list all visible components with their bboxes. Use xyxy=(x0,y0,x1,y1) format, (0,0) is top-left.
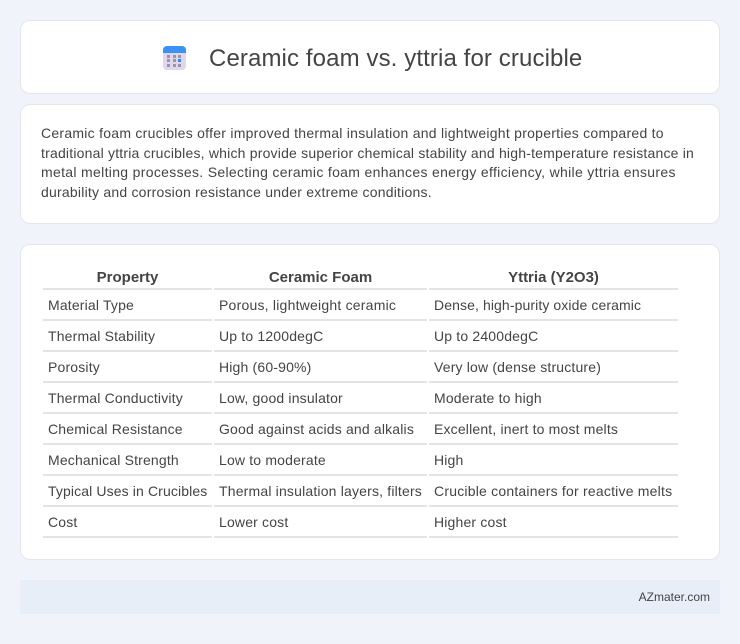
footer credit: AZmater.com xyxy=(639,590,710,604)
intro paragraph xyxy=(41,125,694,200)
comparison table: High (60-90%) xyxy=(219,359,311,375)
comparison table: Chemical Resistance xyxy=(48,421,183,437)
panel: intro text card xyxy=(20,104,720,224)
intro paragraph: traditional yttria crucibles, which provide superior chemical stability and high-temperature resistance in xyxy=(41,145,694,161)
comparison table xyxy=(43,269,678,538)
comparison table: Material Type xyxy=(48,297,134,313)
comparison table: Good against acids and alkalis xyxy=(219,421,414,437)
comparison table: Excellent, inert to most melts xyxy=(434,421,618,437)
comparison table: Thermal insulation layers, filters xyxy=(219,483,422,499)
comparison table: Porous, lightweight ceramic xyxy=(219,297,396,313)
comparison table: Cost xyxy=(48,514,77,530)
footer bar xyxy=(20,580,720,614)
table header: Property: Property xyxy=(97,269,158,286)
table header: Yttria: Yttria (Y2O3) xyxy=(508,269,599,286)
comparison table: Thermal Stability xyxy=(48,328,155,344)
icon: calendar xyxy=(163,46,186,70)
comparison table: Porosity xyxy=(48,359,100,375)
panel: comparison table card xyxy=(20,244,720,560)
comparison table: Mechanical Strength xyxy=(48,452,179,468)
comparison table: Lower cost xyxy=(219,514,288,530)
intro paragraph: metal melting processes. Selecting ceramic foam enhances energy efficiency, while yttria ensures xyxy=(41,164,676,180)
panel: title card xyxy=(20,20,720,94)
comparison table: Up to 1200degC xyxy=(219,328,323,344)
comparison table: Dense, high-purity oxide ceramic xyxy=(434,297,641,313)
comparison table: High xyxy=(434,452,463,468)
intro paragraph: Ceramic foam crucibles offer improved thermal insulation and lightweight properties compared to xyxy=(41,125,664,141)
comparison table: Crucible containers for reactive melts xyxy=(434,483,672,499)
comparison table: Typical Uses in Crucibles xyxy=(48,483,207,499)
table header: Ceramic Foam: Ceramic Foam xyxy=(269,269,372,286)
comparison table: Very low (dense structure) xyxy=(434,359,601,375)
comparison table: Higher cost xyxy=(434,514,507,530)
intro paragraph: durability and corrosion resistance under extreme conditions. xyxy=(41,184,432,200)
comparison table: Thermal Conductivity xyxy=(48,390,183,406)
comparison table: Moderate to high xyxy=(434,390,542,406)
comparison table: Low to moderate xyxy=(219,452,326,468)
comparison table: Up to 2400degC xyxy=(434,328,538,344)
title: Ceramic foam vs. yttria for crucible xyxy=(209,45,582,72)
comparison table: Low, good insulator xyxy=(219,390,343,406)
